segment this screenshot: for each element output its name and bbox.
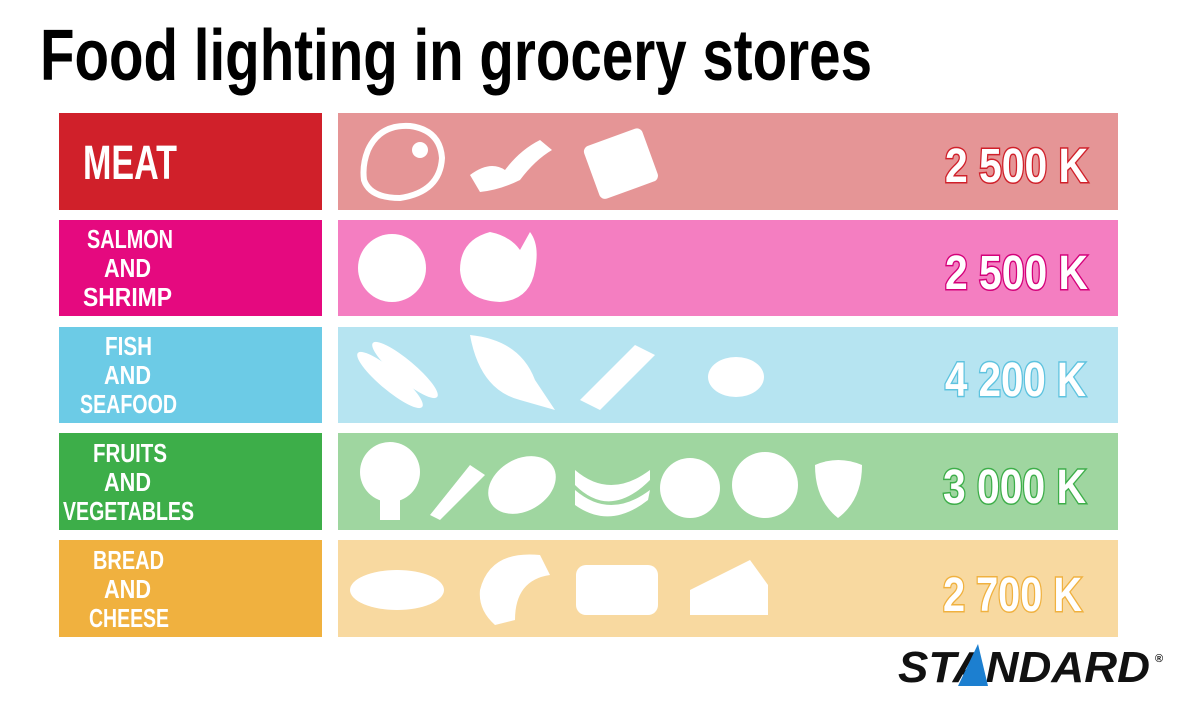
label: fruits and vegetables: FRUITS xyxy=(93,438,167,468)
label: fish and seafood xyxy=(80,331,177,419)
panel: salmon and shrimp xyxy=(59,220,1118,316)
label: fish and seafood: FISH xyxy=(105,331,152,361)
label: fruits and vegetables xyxy=(63,438,194,526)
label: fruits and vegetables: AND xyxy=(104,467,151,497)
label: bread and cheese xyxy=(89,545,169,633)
kelvin: salmon and shrimp: 2 500 K xyxy=(945,247,1088,300)
kelvin: meat: 2 500 K xyxy=(945,140,1088,193)
title: Food lighting in grocery stores xyxy=(40,16,872,96)
label: fish and seafood: AND xyxy=(104,360,151,390)
label: bread and cheese: AND xyxy=(104,574,151,604)
label: salmon and shrimp xyxy=(83,224,173,312)
kelvin: fish and seafood: 4 200 K xyxy=(945,354,1086,407)
label: meat: MEAT xyxy=(83,137,177,190)
panel: fish and seafood xyxy=(59,327,1118,423)
panel: bread and cheese xyxy=(59,540,1118,637)
label: salmon and shrimp: AND xyxy=(104,253,151,283)
icons: salmon and shrimp xyxy=(358,232,537,302)
label: bread and cheese: CHEESE xyxy=(89,603,169,633)
icons: bread and cheese xyxy=(350,554,768,625)
kelvin: bread and cheese: 2 700 K xyxy=(943,569,1082,622)
logo: standard: ® xyxy=(1155,653,1163,665)
panel: fruits and vegetables xyxy=(59,433,1118,530)
label: bread and cheese: BREAD xyxy=(93,545,164,575)
panel: meat xyxy=(59,113,1118,210)
icons: fruits and vegetables xyxy=(360,442,862,526)
logo: standard: STANDARD xyxy=(898,643,1150,692)
icons: meat xyxy=(364,126,660,201)
label: fruits and vegetables: VEGETABLES xyxy=(63,496,194,526)
label: fish and seafood: SEAFOOD xyxy=(80,389,177,419)
icons: fish and seafood xyxy=(351,335,764,415)
kelvin: fruits and vegetables: 3 000 K xyxy=(943,461,1086,514)
label: salmon and shrimp: SHRIMP xyxy=(83,282,172,312)
label: salmon and shrimp: SALMON xyxy=(87,224,173,254)
